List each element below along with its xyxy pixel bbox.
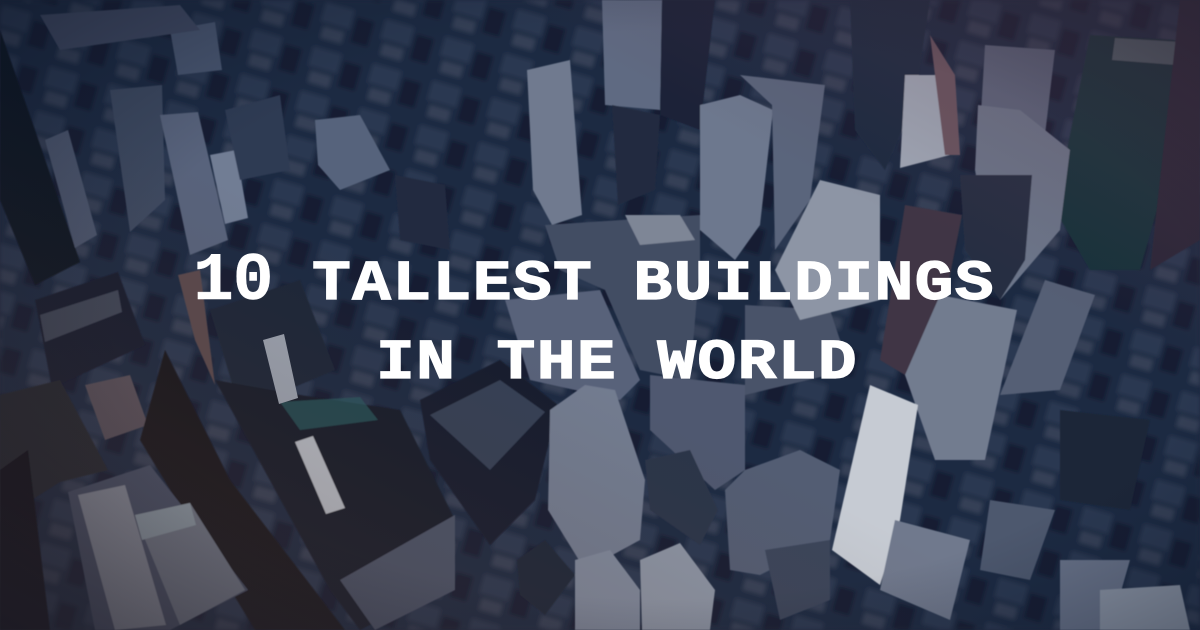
centre towers	[527, 60, 582, 225]
bottom left buildings	[68, 465, 248, 630]
title line 1 number: 10	[193, 243, 273, 320]
title line 2: IN THE WORLD	[376, 331, 858, 396]
title	[193, 243, 995, 396]
sign: Macy's	[263, 334, 298, 404]
left towers	[0, 30, 80, 285]
title line 1: TALLEST BUILDINGS	[312, 252, 995, 317]
right towers	[850, 0, 930, 170]
